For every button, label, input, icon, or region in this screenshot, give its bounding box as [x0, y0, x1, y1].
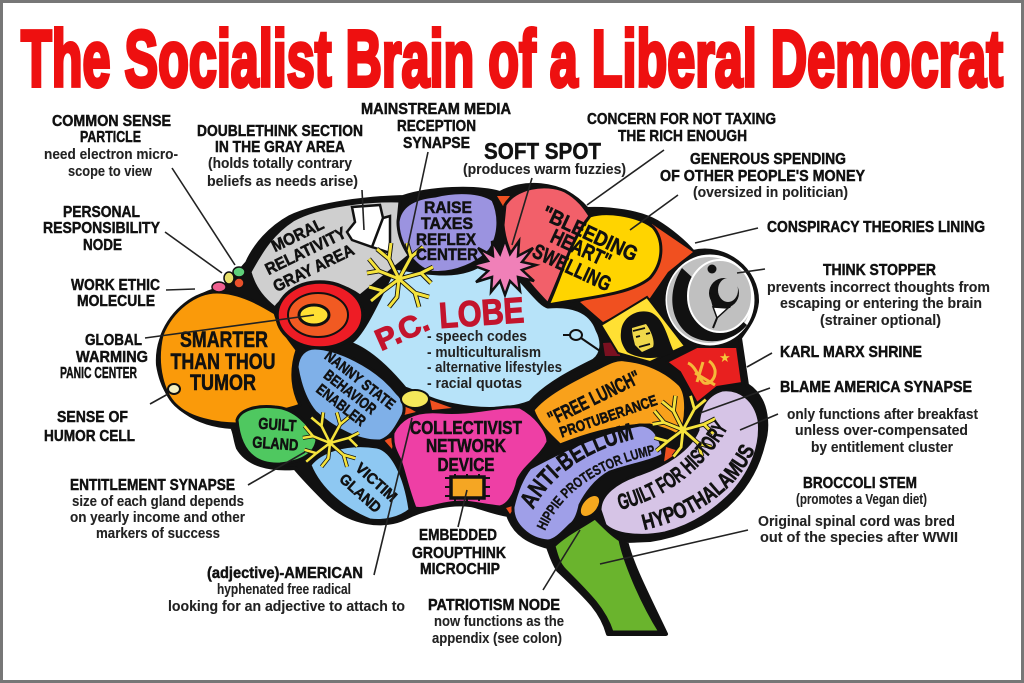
label: karl marx shrine: KARL MARX SHRINE: [780, 344, 922, 361]
text: P.C. lobe: [370, 289, 525, 357]
label: mainstream media reception synapse: RECEPTION: [397, 118, 476, 135]
label: entitlement synapse: ENTITLEMENT SYNAPSE: [70, 477, 235, 494]
text: collectivist network device: NETWORK: [426, 436, 506, 456]
text: P.C. lobe: P.C.: [370, 305, 434, 357]
text: anti-bellum hippie protestor lump: HIPPIE PROTESTOR LUMP: [536, 445, 654, 530]
label: doublethink section: IN THE GRAY AREA: [215, 139, 345, 156]
label: concern for not taxing: THE RICH ENOUGH: [618, 128, 747, 145]
icon: patriotism node: [576, 491, 604, 521]
label: adjective american: (adjective)-AMERICAN: [207, 565, 363, 582]
label: common sense particle: need electron micro-: [44, 147, 178, 163]
region: guilt for history hypothalamus: [600, 390, 760, 535]
label: patriotism node: now functions as the: [434, 614, 564, 630]
label: soft spot: [463, 138, 626, 178]
label: broccoli stem: BROCCOLI STEM: [803, 475, 917, 492]
label: work ethic molecule: [71, 277, 160, 310]
text: smarter than thou tumor: SMARTER: [180, 327, 268, 352]
text: moral relativity gray area: MORAL: [269, 215, 327, 256]
icon: small nodes: [212, 267, 245, 292]
icon: soft spot starburst: [472, 240, 536, 295]
label: sense of humor cell: HUMOR CELL: [44, 428, 135, 445]
label: doublethink section: DOUBLETHINK SECTION: [197, 123, 363, 140]
text: nanny state behavior enabler: NANNY STATE: [321, 348, 398, 413]
text: guilt for history hypothalamus: HYPOTHALAMUS: [641, 444, 754, 530]
text: guilt gland: GLAND: [252, 434, 299, 455]
text: bleeding heart swelling: SWELLING: [529, 240, 615, 296]
label: adjective american: [168, 565, 405, 615]
label: patriotism node: PATRIOTISM NODE: [428, 597, 560, 614]
icon: sense of humor cell: [168, 384, 180, 394]
text: P.C. lobe list: - speech codes: [427, 329, 527, 345]
label: think stopper: escaping or entering the brain: [780, 296, 982, 312]
label: doublethink section: (holds totally contrary: [208, 156, 352, 172]
label: adjective american: hyphenated free radical: [217, 582, 351, 598]
icon: synapse moral: [367, 243, 433, 307]
text: nanny state behavior enabler: ENABLER: [313, 381, 369, 430]
text: P.C. lobe list: - multiculturalism: [427, 345, 541, 361]
text: collectivist network device: [410, 418, 522, 475]
text: guilt for history hypothalamus: [618, 419, 754, 530]
label: embedded groupthink microchip: EMBEDDED: [419, 527, 497, 544]
label: global warming panic center: WARMING: [76, 349, 148, 366]
label: entitlement synapse: markers of success: [96, 526, 220, 542]
label: mainstream media reception synapse: [361, 101, 511, 152]
icon: synapse guilt gland: [303, 412, 359, 467]
region: guilt gland: [237, 407, 317, 464]
label: embedded groupthink microchip: MICROCHIP: [420, 561, 500, 578]
icon: double think paper: [347, 205, 390, 253]
label: common sense particle: COMMON SENSE: [52, 113, 171, 130]
text: free lunch protuberance: "FREE LUNCH": [545, 367, 644, 430]
label: broccoli stem: Original spinal cord was bred: [758, 514, 955, 530]
label: sense of humor cell: SENSE OF: [57, 409, 128, 426]
text: moral relativity gray area: RELATIVITY: [262, 224, 349, 279]
region: bleeding heart pink: [503, 187, 590, 304]
label: global warming panic center: GLOBAL: [85, 332, 142, 349]
text: victim gland: VICTIM: [352, 460, 400, 506]
label: broccoli stem: [758, 475, 958, 546]
label: embedded groupthink microchip: [412, 527, 507, 578]
label: personal responsibility node: NODE: [83, 237, 122, 254]
text: P.C. lobe list: - racial quotas: [427, 376, 522, 392]
region: smarter than thou tumor: [159, 292, 300, 424]
label: broccoli stem: (promotes a Vegan diet): [796, 492, 927, 508]
icon: Karl Marx shrine hammer and sickle: ★: [719, 350, 731, 365]
label: global warming panic center: PANIC CENTER: [60, 365, 137, 382]
text: smarter than thou tumor: THAN THOU: [170, 349, 276, 374]
icon: think stopper: [664, 253, 756, 347]
text: bleeding heart swelling: "BLEEDING: [538, 202, 641, 266]
label: concern for not taxing: [587, 111, 776, 145]
region: free lunch protuberance: [533, 360, 686, 445]
label: blame america synapse: BLAME AMERICA SYNAPSE: [780, 379, 972, 396]
icon: yellow cell: [401, 390, 429, 408]
icon: global warming panic center target: [277, 282, 363, 348]
label: common sense particle: [44, 113, 178, 180]
text: raise taxes reflex center: REFLEX: [416, 230, 477, 249]
text: P.C. lobe list: - alternative lifestyles: [427, 360, 562, 376]
label: personal responsibility node: RESPONSIBILITY: [43, 220, 161, 237]
region: anti-bellum lump: [513, 425, 663, 541]
text: collectivist network device: DEVICE: [438, 455, 494, 475]
text: guilt for history hypothalamus: GUILT FOR HISTORY: [618, 419, 727, 510]
icon: lollipop connector: [563, 330, 600, 351]
text: smarter than thou tumor: TUMOR: [190, 370, 256, 395]
text: free lunch protuberance: PROTUBERANCE: [558, 392, 660, 441]
label: work ethic molecule: WORK ETHIC: [71, 277, 160, 294]
text: guilt gland: [252, 416, 299, 455]
label: entitlement synapse: [70, 477, 245, 542]
text: victim gland: GLAND: [336, 471, 384, 517]
label: sense of humor cell: [44, 409, 135, 445]
label: broccoli stem: out of the species after WWII: [760, 530, 958, 546]
text: anti-bellum hippie protestor lump: ANTI-BELLUM: [521, 422, 634, 510]
text: P.C. lobe: LOBE: [438, 289, 525, 336]
text: raise taxes reflex center: CENTER: [416, 245, 478, 264]
label: patriotism node: appendix (see colon): [432, 631, 562, 647]
label: generous spending: [660, 151, 866, 201]
label: think stopper: THINK STOPPER: [823, 262, 936, 279]
label: personal responsibility node: PERSONAL: [63, 204, 140, 221]
label: adjective american: looking for an adjective to attach to: [168, 599, 405, 615]
label: entitlement synapse: size of each gland depends: [72, 494, 244, 510]
label: think stopper: [767, 262, 990, 329]
text: P.C. lobe list: [427, 329, 562, 392]
label: blame america synapse: [780, 379, 978, 456]
label: mainstream media reception synapse: SYNAPSE: [403, 135, 470, 152]
text: free lunch protuberance: [545, 367, 660, 441]
text: moral relativity gray area: GRAY AREA: [270, 241, 357, 296]
text: nanny state behavior enabler: BEHAVIOR: [320, 367, 380, 418]
label: generous spending: (oversized in politician): [693, 185, 848, 201]
label: generous spending: OF OTHER PEOPLE'S MONEY: [660, 168, 866, 185]
region: raise taxes reflex center: [398, 193, 498, 272]
label: global warming panic center: [60, 332, 148, 382]
label: doublethink section: beliefs as needs arise): [207, 174, 358, 190]
text: bleeding heart swelling: HEART": [547, 225, 615, 273]
text: raise taxes reflex center: [416, 198, 478, 264]
icon: microchip: [445, 474, 490, 501]
region: P.C. lobe: [350, 262, 601, 408]
text: guilt gland: GUILT: [258, 416, 297, 435]
region: nanny state behavior enabler: [297, 348, 404, 441]
label: embedded groupthink microchip: GROUPTHINK: [412, 545, 507, 562]
region: collectivist network device: [393, 407, 548, 508]
label: doublethink section: [197, 123, 363, 190]
label: soft spot: SOFT SPOT: [484, 138, 601, 164]
orange filler patches: [384, 196, 693, 514]
text: collectivist network device: COLLECTIVIST: [410, 418, 522, 438]
icon: Karl Marx shrine hammer and sickle: [667, 347, 742, 403]
icon: Che poster: [601, 297, 685, 362]
label: generous spending: GENEROUS SPENDING: [690, 151, 846, 168]
label: think stopper: (strainer optional): [820, 313, 941, 329]
region: bleeding heart yellow: [548, 214, 661, 305]
icon: synapse free lunch: [653, 396, 715, 457]
text: bleeding heart swelling: [529, 202, 641, 296]
label: common sense particle: scope to view: [68, 164, 153, 180]
label: mainstream media reception synapse: MAINSTREAM MEDIA: [361, 101, 511, 118]
text: raise taxes reflex center: TAXES: [421, 214, 473, 233]
leader lines: [145, 150, 778, 590]
text: victim gland: [336, 460, 400, 517]
label: concern for not taxing: CONCERN FOR NOT TAXING: [587, 111, 776, 128]
label: soft spot: (produces warm fuzzies): [463, 162, 626, 178]
region: brain stem broccoli: [554, 518, 660, 632]
brain silhouette: [158, 185, 766, 634]
label: blame america synapse: unless over-compensated: [795, 423, 968, 439]
region: victim gland: [310, 446, 410, 521]
label: conspiracy theories lining: CONSPIRACY THEORIES LINING: [767, 219, 985, 236]
label: entitlement synapse: on yearly income and other: [70, 510, 245, 526]
label: blame america synapse: by entitlement cluster: [811, 440, 953, 456]
label: personal responsibility node: [43, 204, 161, 254]
brain illustration: [156, 182, 768, 636]
region: moral relativity gray area: [250, 201, 410, 308]
label: common sense particle: PARTICLE: [80, 129, 141, 146]
label: patriotism node: [428, 597, 564, 647]
label: think stopper: prevents incorrect thoughts from: [767, 280, 990, 296]
text: raise taxes reflex center: RAISE: [424, 198, 472, 217]
label: blame america synapse: only functions after breakfast: [787, 407, 978, 423]
text: smarter than thou tumor: [170, 327, 276, 395]
label: work ethic molecule: MOLECULE: [77, 293, 155, 310]
